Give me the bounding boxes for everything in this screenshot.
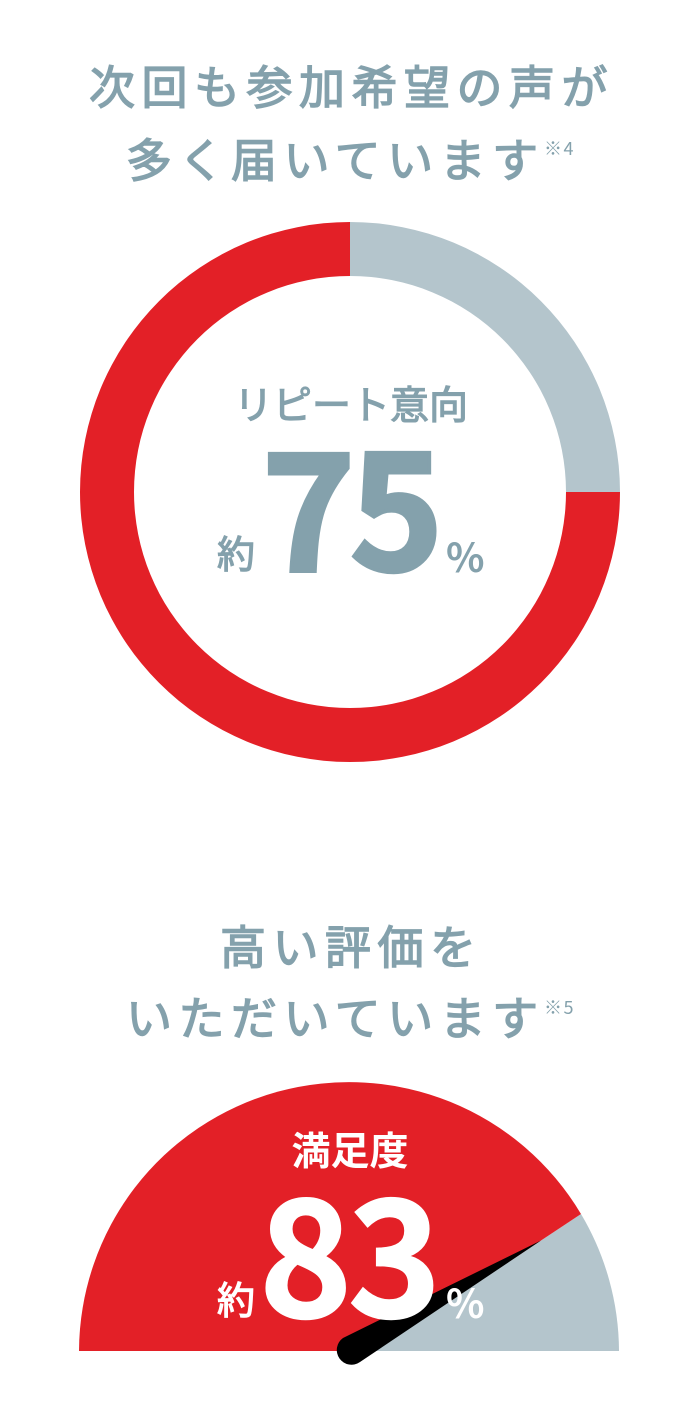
gauge value: about 83 percent: % (446, 1272, 485, 1330)
gauge value: about 83 percent: 8 (259, 1134, 352, 1363)
donut label: repeat intention: リピート意向 (234, 375, 468, 431)
gauge value: about 83 percent: 3 (348, 1134, 441, 1363)
heading: repeat section: 多く届いています (126, 125, 545, 191)
donut value: about 75 percent: 5 (350, 387, 443, 616)
heading: satisfaction section: 高い評価を (220, 912, 482, 978)
donut value: about 75 percent: % (446, 526, 485, 584)
heading: repeat section (89, 52, 614, 191)
gauge value: about 83 percent: 約 (217, 1270, 255, 1325)
heading: repeat section: ※4 (544, 135, 575, 161)
donut value: about 75 percent: 約 (217, 524, 255, 579)
gauge chart: satisfaction 83% (79, 1082, 619, 1365)
gauge label: satisfaction: 満足度 (291, 1121, 409, 1177)
heading: satisfaction section: いただいています (126, 983, 545, 1049)
heading: satisfaction section: ※5 (544, 994, 575, 1020)
heading: repeat section: 次回も参加希望の声が (89, 52, 614, 118)
donut value: about 75 percent: 7 (262, 388, 355, 617)
donut chart: repeat intention 75% (80, 222, 620, 762)
heading: satisfaction section (126, 912, 575, 1049)
gauge needle (337, 1240, 541, 1365)
gauge value: about 83 percent (217, 1134, 485, 1363)
donut value: about 75 percent (217, 387, 485, 617)
